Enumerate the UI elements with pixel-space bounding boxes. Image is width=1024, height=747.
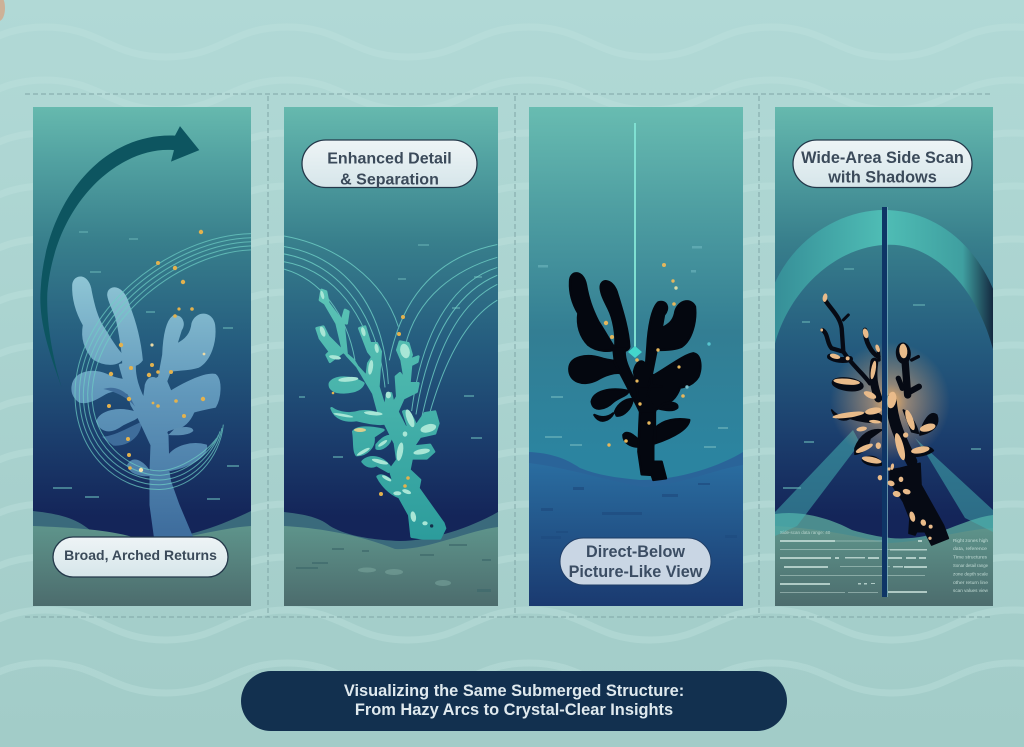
coral silhouette hazy [73,278,219,537]
corner accent [0,0,5,21]
label: wide-area side scan [793,140,972,188]
arched sonar returns [75,234,252,490]
label: direct-below view: Picture-Like View [569,563,703,581]
sonar ping beam [628,123,642,358]
gold echo dots [604,263,711,447]
water streaks [299,244,482,458]
seabed [284,512,498,606]
panel: broad arched returns [33,107,252,606]
water streaks [538,246,728,448]
side readout text: Right zones high [953,538,988,544]
side readout text: scan values view [953,588,989,594]
side readout text [953,538,989,594]
side readout text: other return line [953,580,988,586]
seabed [529,452,743,606]
scan beams [775,430,993,536]
panel: enhanced detail [284,107,498,606]
label: broad arched returns: Broad, Arched Returns [64,547,217,563]
label: enhanced detail: Enhanced Detail [327,150,452,168]
side readout text: zone depth scale [953,572,988,578]
title banner: Visualizing the Same Submerged Structure: [344,682,684,700]
coral: black silhouette [569,273,700,480]
coral: teal detailed [317,290,445,538]
coral: shadowed with highlights [820,293,948,545]
label: enhanced detail: & Separation [340,172,439,188]
side readout text: Time structures [953,554,988,560]
label: direct-below view: Direct-Below [586,543,685,561]
panel: direct-below view [529,107,743,606]
side readout text: data, reference [953,546,987,552]
reflection glow [834,346,947,459]
sonar return curves [284,236,497,418]
label: broad arched returns [53,537,228,577]
gold echo dots [332,315,410,496]
label: direct-below view [560,538,711,585]
towfish track bar [882,207,888,597]
label: enhanced detail [302,140,477,188]
label: wide-area side scan: Wide-Area Side Scan [801,149,964,167]
water streaks [53,231,239,500]
label: wide-area side scan: with Shadows [827,168,937,186]
seabed [33,511,251,606]
seabed [775,513,993,606]
side readout text: Sonar detail range [953,563,988,569]
title banner: From Hazy Arcs to Crystal-Clear Insights [355,701,673,719]
scan arch [775,210,993,350]
gold echo dots [107,230,205,472]
small caption top: Side-scan data range: 40 [780,530,831,535]
icon: sweep arrow [40,126,199,387]
title banner [241,671,787,731]
panel: wide-area side scan [775,107,993,606]
water streaks [783,268,981,489]
sonar record lines [780,540,927,593]
